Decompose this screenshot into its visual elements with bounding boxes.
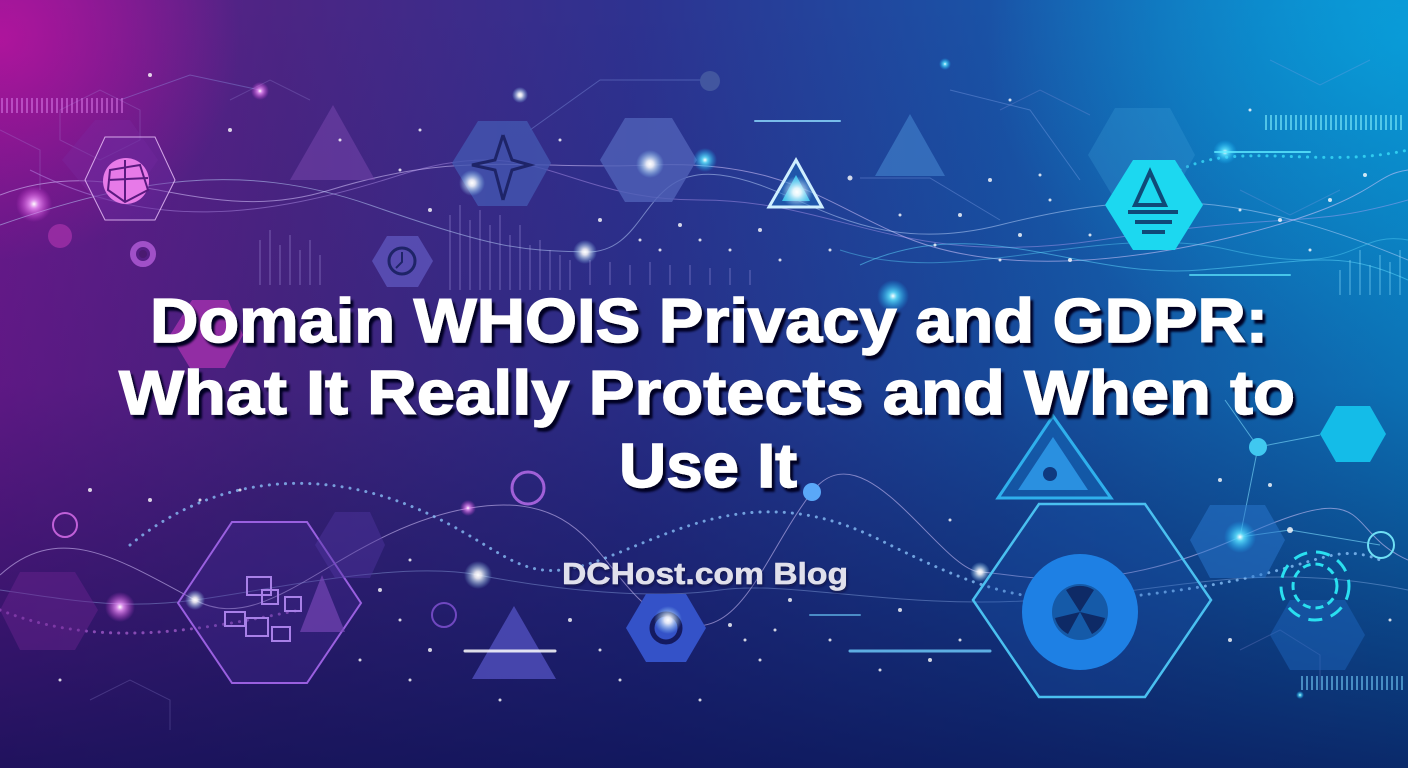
hexagon: left behind title	[170, 300, 243, 368]
dotted arcs	[0, 150, 1408, 633]
hexagon: ship icon	[1088, 108, 1203, 250]
hexagon: plain	[600, 118, 697, 202]
triangle: plain top right	[875, 114, 945, 176]
hexagon: faint bottom left	[0, 512, 385, 650]
triangle: warning	[769, 160, 822, 207]
triangle: top left	[290, 105, 375, 180]
light streaks	[465, 121, 1310, 651]
hexagon: cyan right	[1320, 406, 1386, 462]
triangle: warning bottom right	[998, 416, 1111, 498]
title: What It Really Protects and When to	[119, 359, 1295, 428]
hexagon: data block top left	[62, 120, 175, 220]
triangle: bottom centre	[472, 606, 556, 679]
title: Domain WHOIS Privacy and GDPR:	[150, 287, 1268, 356]
glowing particles	[16, 58, 1304, 699]
large hexagon: radiation icon	[973, 504, 1211, 697]
hexagon: star icon	[452, 121, 551, 206]
equalizer bars	[2, 98, 1402, 690]
title: Use It	[619, 432, 797, 501]
ring node right	[1368, 532, 1394, 558]
title	[119, 287, 1295, 501]
ring nodes bottom left	[53, 472, 544, 627]
hexagon: clock small	[372, 236, 433, 287]
icon: purple dots top left	[48, 224, 153, 264]
hexagon: lock icon bottom centre	[626, 594, 706, 662]
small dots	[58, 73, 1392, 702]
hexagons: faint bottom right	[1190, 505, 1365, 670]
target icon	[1281, 552, 1349, 620]
subtitle: blog name: DCHost.com Blog	[562, 556, 848, 591]
hexagon: network outline bottom left	[178, 522, 361, 683]
